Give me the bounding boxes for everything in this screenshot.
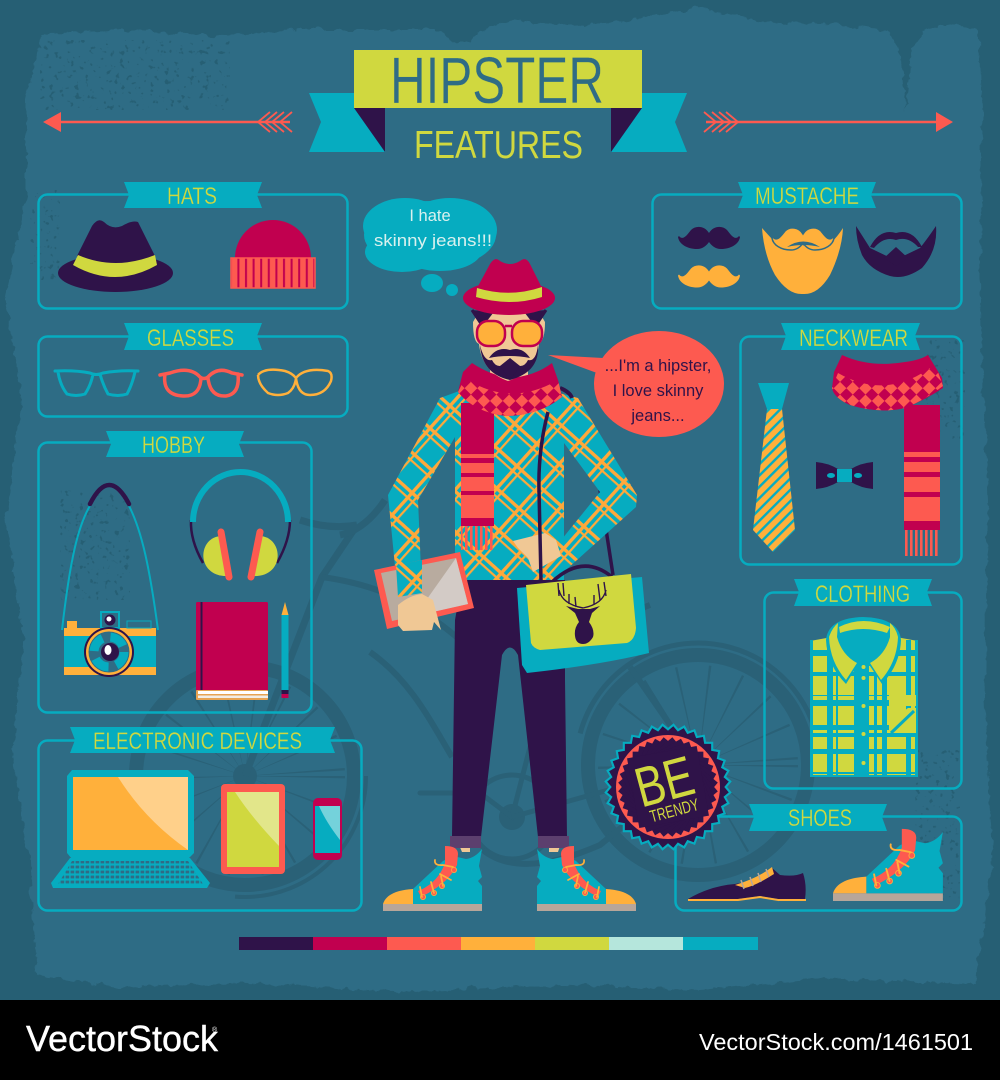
right shoe bbox=[537, 846, 636, 911]
icon: notebook bbox=[196, 602, 268, 700]
heading: electronic devices: ELECTRONIC DEVICES bbox=[93, 728, 302, 755]
icon: orange mustache bbox=[678, 265, 740, 288]
sweater bbox=[388, 390, 637, 597]
registered mark: ® bbox=[212, 1026, 218, 1034]
heading: shoes: SHOES bbox=[788, 805, 852, 832]
panel: neckwear bbox=[740, 323, 962, 564]
subtitle: FEATURES bbox=[414, 124, 583, 167]
ribbon tails bbox=[309, 93, 687, 152]
thought bubble bbox=[363, 198, 497, 296]
icon: orange glasses bbox=[258, 370, 332, 395]
badge: be trendy bbox=[604, 723, 732, 851]
pants bbox=[452, 580, 567, 837]
icon: headphones bbox=[191, 472, 290, 577]
icon: necktie bbox=[753, 383, 795, 552]
icon: tablet bbox=[221, 784, 285, 874]
panel: hats bbox=[38, 182, 348, 308]
title text: HIPSTER bbox=[390, 43, 604, 117]
cuffs and skin bbox=[450, 836, 569, 852]
icon: coral glasses bbox=[160, 370, 242, 396]
tablet bbox=[374, 552, 474, 629]
icon: fedora bbox=[58, 220, 173, 292]
panel: mustache bbox=[652, 182, 962, 308]
footer bar bbox=[0, 1000, 1000, 1080]
thought text: I hate bbox=[409, 207, 451, 225]
left shoe bbox=[383, 846, 482, 911]
left hand bbox=[398, 594, 441, 631]
icon: laptop bbox=[51, 770, 210, 888]
strap back bbox=[600, 490, 613, 575]
icon: phone bbox=[313, 798, 342, 860]
heading: neckwear: NECKWEAR bbox=[799, 325, 908, 352]
icon: dark beard bbox=[856, 226, 936, 277]
panel: glasses bbox=[38, 323, 348, 416]
icon: camera bbox=[62, 485, 158, 677]
glasses on face bbox=[477, 321, 542, 346]
speech text: ...I'm a hipster, bbox=[605, 357, 711, 375]
title plate bbox=[354, 50, 642, 108]
bicycle silhouette bbox=[124, 500, 847, 914]
icon: bow tie bbox=[816, 462, 873, 489]
icon: orange beard bbox=[762, 228, 843, 294]
left arrow bbox=[43, 112, 292, 132]
neck bbox=[490, 365, 528, 385]
heading: mustache: MUSTACHE bbox=[755, 183, 859, 210]
scarf collar bbox=[458, 363, 562, 416]
strap front bbox=[539, 412, 548, 580]
colour bar bbox=[239, 937, 758, 950]
panel: shoes bbox=[676, 804, 962, 910]
heading: hobby: HOBBY bbox=[142, 432, 205, 459]
strap neck bbox=[560, 388, 572, 398]
icon: sneaker bbox=[833, 829, 943, 901]
icon: stag head bbox=[558, 582, 606, 644]
icon: striped scarf bbox=[832, 355, 943, 556]
head bbox=[472, 310, 546, 381]
badge text: BE bbox=[628, 743, 701, 819]
heading: clothing: CLOTHING bbox=[815, 581, 910, 608]
sleeve overlap bbox=[396, 560, 422, 597]
title banner bbox=[309, 43, 687, 167]
right arrow bbox=[704, 112, 953, 132]
icon: pencil bbox=[282, 602, 288, 698]
panel: hobby bbox=[38, 431, 312, 712]
speech bubble bbox=[548, 331, 724, 437]
thought bubble: skinny jeans!!! bbox=[374, 232, 492, 250]
icon: teal glasses bbox=[55, 371, 138, 396]
icon: beanie bbox=[231, 220, 315, 288]
speech text: I love skinny bbox=[613, 382, 704, 400]
panel: electronic devices bbox=[38, 727, 362, 910]
scarf tail bbox=[461, 403, 494, 550]
hipster figure bbox=[374, 259, 649, 911]
speech text: jeans... bbox=[630, 407, 685, 425]
badge text: TRENDY bbox=[648, 795, 701, 826]
icon: oxford shoe bbox=[688, 867, 806, 900]
bag bbox=[517, 566, 649, 673]
icon: plaid shirt bbox=[810, 617, 918, 777]
speech text bbox=[605, 357, 711, 425]
panel: clothing bbox=[764, 579, 962, 788]
icon: dark mustache bbox=[678, 227, 740, 249]
footer url: VectorStock.com/1461501 bbox=[699, 1029, 973, 1055]
right hand bbox=[513, 533, 561, 572]
footer brand: VectorStock bbox=[26, 1018, 219, 1059]
hat bbox=[463, 259, 555, 315]
heading: glasses: GLASSES bbox=[147, 325, 234, 352]
heading: hats: HATS bbox=[167, 183, 217, 210]
